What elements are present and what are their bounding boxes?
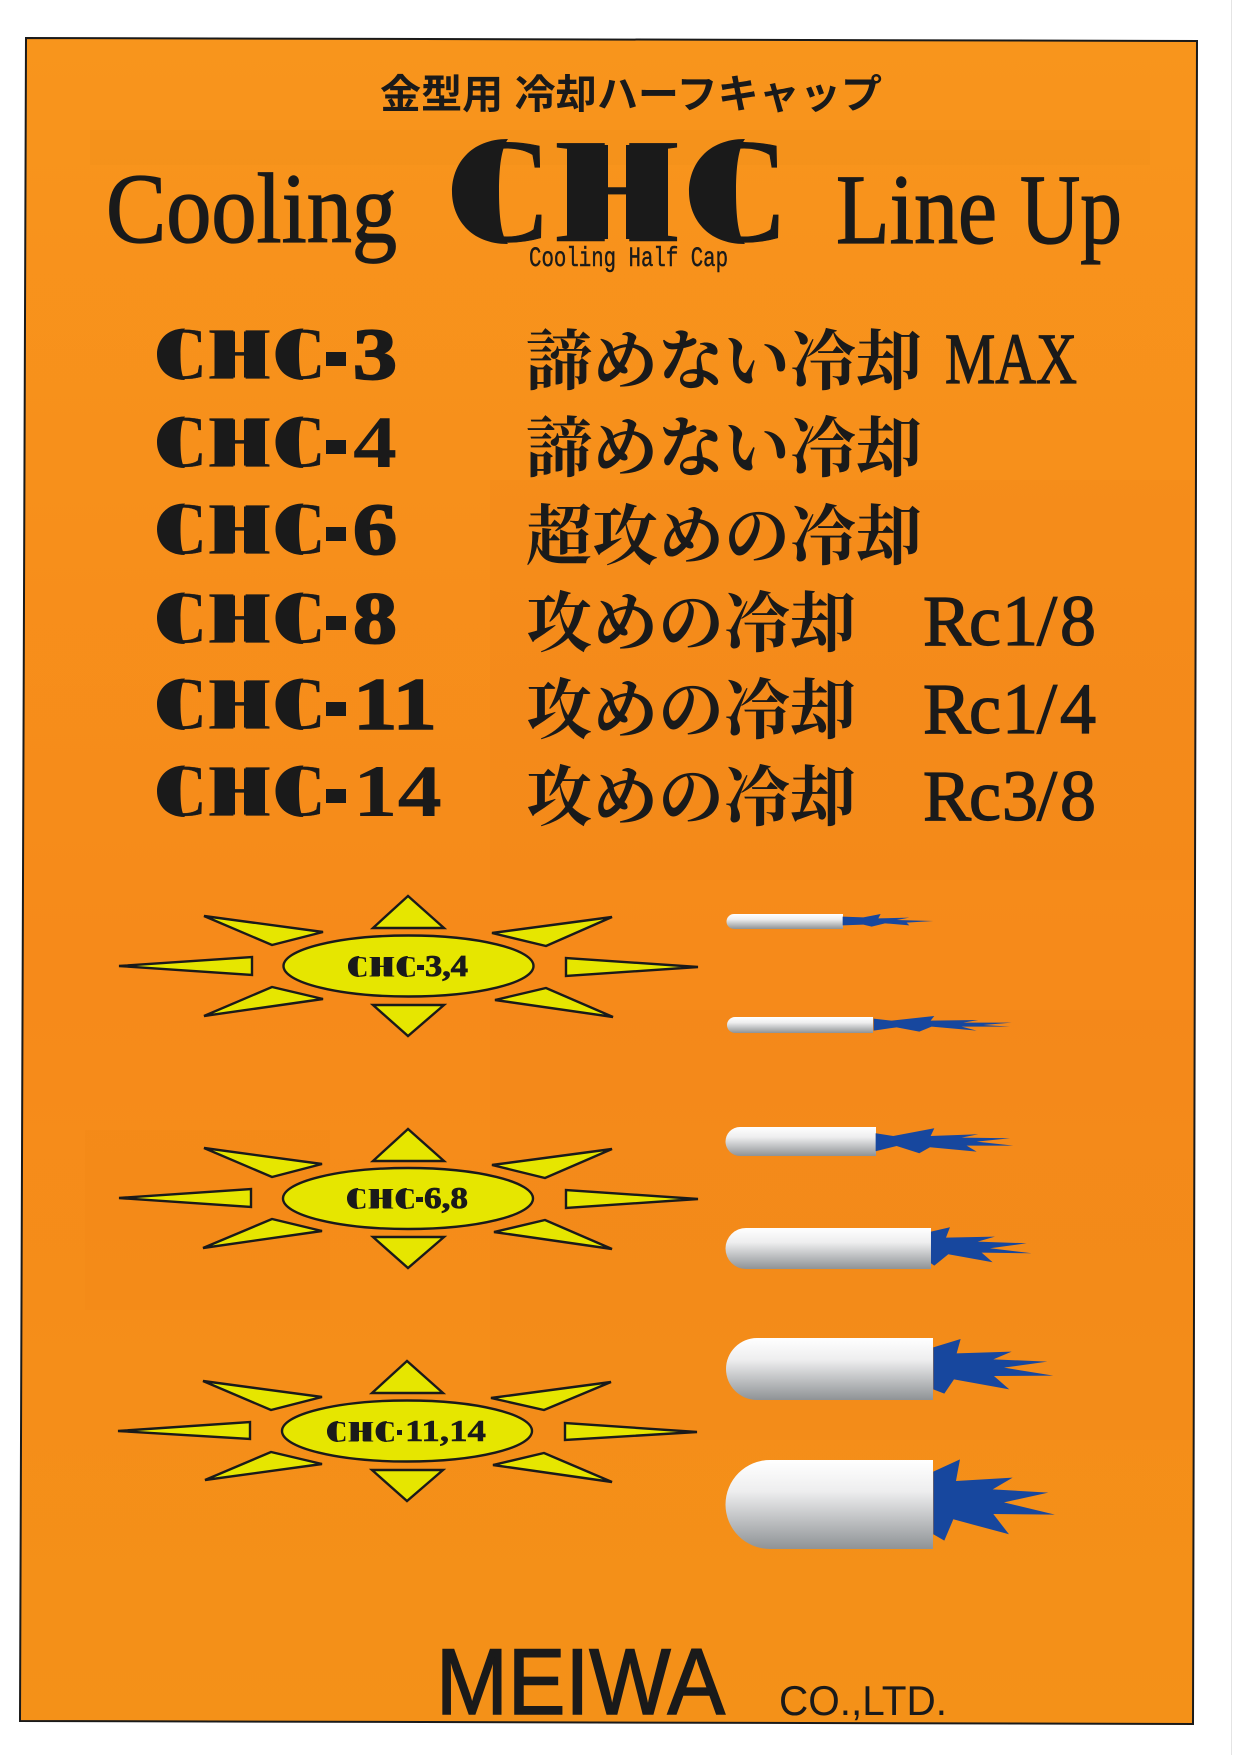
sunburst: CHC-6,8 [119, 1129, 698, 1268]
heading: big CHC logo: C [687, 109, 786, 274]
sunburst: CHC-3,4 [119, 896, 698, 1036]
title: Japanese heading: 金型用 冷却ハーフキャップ [380, 73, 882, 117]
logo: MEIWA: MEIWA [436, 1629, 725, 1734]
sunburst: CHC-6,8: C [395, 1182, 416, 1215]
row: CHC-8: Rc1/8 [923, 581, 1096, 661]
row: CHC-3 [156, 313, 1077, 399]
row: CHC-8: H [207, 577, 272, 658]
row: CHC-3: MAX [945, 319, 1077, 399]
row: CHC-8: C [274, 577, 324, 658]
row: CHC-8: 8 [353, 578, 397, 659]
row: CHC-14: 攻めの冷却 [526, 762, 856, 835]
row: CHC-14: C [274, 750, 324, 831]
row: CHC-6: C [156, 488, 206, 569]
icon: cap 5 with coolant jet [726, 1338, 1053, 1400]
heading: big CHC logo: C [450, 109, 549, 274]
row: CHC-4: C [274, 401, 324, 482]
sunburst: CHC-11,14: 11,14 [405, 1413, 486, 1448]
heading: Cooling: Cooling [106, 153, 397, 264]
heading: Line Up: Up [1020, 154, 1122, 265]
heading: big CHC logo [450, 109, 786, 274]
row: CHC-11: 攻めの冷却 [526, 675, 856, 748]
row: CHC-11: Rc1/4 [923, 669, 1096, 749]
icon: cap 3 with coolant jet [726, 1127, 1013, 1156]
icon: cap 6 with coolant jet [726, 1459, 1055, 1549]
icon: cap 4 with coolant jet [726, 1227, 1032, 1269]
row: CHC-14 [156, 750, 1096, 836]
row: CHC-4: 4 [353, 402, 397, 484]
row: CHC-4: C [156, 401, 206, 482]
row: CHC-3: H [207, 313, 272, 394]
subtitle: Cooling Half Cap: Cooling Half Cap [529, 244, 728, 275]
row: CHC-11: C [156, 663, 206, 744]
sunburst: CHC-6,8: 6,8 [424, 1180, 468, 1215]
row: CHC-6: H [207, 488, 272, 569]
row: CHC-6: 超攻めの冷却 [526, 501, 922, 574]
sunburst: CHC-3,4: H [368, 950, 395, 983]
row: CHC-8 [156, 577, 1096, 661]
icon: cap 2 with coolant jet [727, 1016, 1012, 1033]
row: CHC-4: H [207, 401, 272, 482]
icon: cap 1 with coolant jet [726, 914, 933, 929]
row: CHC-3: 3 [353, 314, 397, 395]
row: CHC-4: 諦めない冷却 [526, 413, 922, 486]
row: CHC-4 [156, 401, 922, 486]
sunburst: CHC-6,8: C [347, 1182, 367, 1215]
row: CHC-14: H [207, 750, 272, 831]
row: CHC-8: 攻めの冷却 [526, 588, 856, 661]
row: CHC-11: 11 [353, 664, 437, 746]
row: CHC-6 [156, 488, 922, 574]
row: CHC-3: C [156, 313, 206, 394]
row: CHC-14: 14 [353, 751, 442, 833]
sunburst: CHC-11,14: C [375, 1415, 396, 1448]
row: CHC-6: 6 [353, 489, 397, 570]
row: CHC-11 [156, 663, 1096, 749]
heading: Line Up: Line [836, 154, 997, 265]
sunburst: CHC-11,14 [118, 1361, 697, 1501]
row: CHC-14: C [156, 750, 206, 831]
row: CHC-8: C [156, 577, 206, 658]
row: CHC-3: C [274, 313, 324, 394]
sunburst: CHC-3,4: 3,4 [425, 948, 468, 983]
heading: Line Up [836, 154, 1122, 265]
sunburst: CHC-11,14: C [327, 1415, 347, 1448]
row: CHC-14: Rc3/8 [923, 756, 1096, 836]
sunburst: CHC-11,14: H [347, 1415, 374, 1448]
sunburst: CHC-6,8: H [367, 1182, 394, 1215]
sunburst: CHC-3,4: C [348, 950, 368, 983]
row: CHC-3: 諦めない冷却 [526, 326, 922, 399]
sunburst: CHC-3,4: C [396, 950, 417, 983]
row: CHC-11: H [207, 663, 272, 744]
row: CHC-6: C [274, 488, 324, 569]
heading: big CHC logo: H [552, 109, 682, 274]
row: CHC-11: C [274, 663, 324, 744]
logo: CO.,LTD.: CO.,LTD. [779, 1677, 947, 1724]
